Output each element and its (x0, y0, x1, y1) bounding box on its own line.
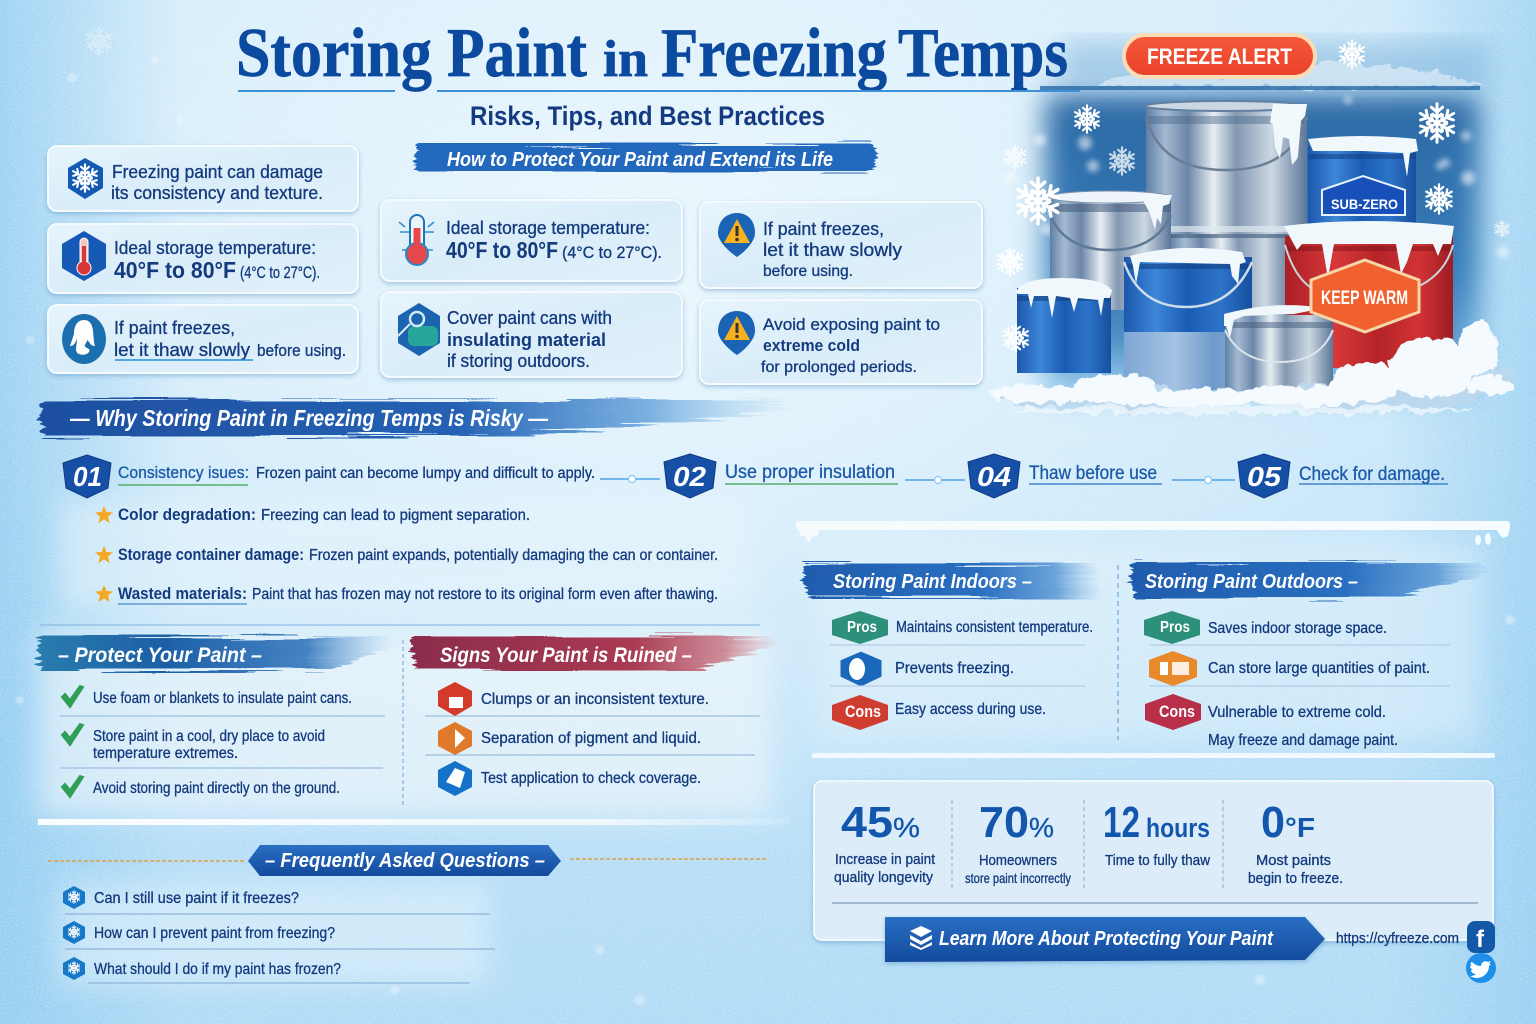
pros: saves space: Saves indoor storage space. (1208, 620, 1387, 637)
text: its consistency and texture. (111, 183, 323, 203)
panel: thaw card left (48, 305, 358, 373)
panel: freezing damage card (48, 146, 358, 211)
tip: cool dry place: Store paint in a cool, dry place to avoid (93, 728, 325, 745)
hero backdrop (1045, 95, 1480, 395)
cons: vulnerable: May freeze and damage paint. (1208, 732, 1398, 749)
step 04 (968, 454, 1162, 498)
step 01: 01 (73, 461, 102, 492)
freeze alert badge: FREEZE ALERT (1147, 44, 1292, 69)
text: Freezing paint can damage (112, 162, 323, 182)
text: 40°F to 80°F (446, 237, 558, 263)
benefit: large quantities: Can store large quantities of paint. (1208, 660, 1430, 677)
tip: off the ground (62, 776, 340, 797)
small silver can (1224, 305, 1333, 391)
top ledge with snow (1040, 42, 1490, 90)
panel: signs paint is ruined (412, 636, 780, 796)
text: insulating material (447, 330, 606, 350)
icon: facebook (1467, 921, 1495, 953)
faq heading: – Frequently Asked Questions – (265, 850, 545, 872)
ice bar (796, 521, 1510, 545)
panel: protect your paint (38, 636, 396, 797)
tip: foam (62, 686, 352, 707)
risk: color degradation (95, 505, 530, 524)
step 05 (1238, 454, 1448, 498)
sign: clumps: Clumps or an inconsistent texture. (481, 691, 709, 708)
heading (412, 636, 780, 670)
title: Temps (898, 15, 1068, 92)
title: Freezing (661, 15, 887, 92)
panel: storing outdoors (1130, 562, 1490, 749)
stat: 45% (834, 798, 936, 886)
cons: easy access: Easy access during use. (895, 701, 1046, 718)
text: let it thaw slowly (763, 240, 902, 260)
stat: 70%: 70 (979, 798, 1029, 847)
subtitle: Risks, Tips, and Best Practices (470, 101, 825, 131)
text (761, 315, 940, 376)
text (111, 162, 323, 203)
question 2 (63, 921, 335, 944)
connector (1172, 476, 1235, 484)
cons: vulnerable: Vulnerable to extreme cold. (1208, 704, 1386, 721)
panel: thaw card right (700, 202, 982, 288)
pros: consistent temperature: Maintains consistent temperature. (896, 619, 1093, 636)
icon: thermometer (399, 215, 434, 265)
cons: easy access: Cons (845, 702, 881, 721)
step 01: Frozen paint can become lumpy and difficult to apply. (256, 465, 595, 482)
sign: separation: Separation of pigment and liquid. (481, 730, 701, 747)
stat: 70% (965, 798, 1071, 886)
tip: off the ground: Avoid storing paint directly on the ground. (93, 780, 340, 797)
icon: warning (718, 213, 755, 257)
stat: 45%: Increase in paint (835, 851, 936, 868)
icon: warning (718, 311, 755, 355)
icon: stack (910, 926, 932, 950)
cons: vulnerable (1145, 694, 1398, 749)
text: Ideal storage temperature: (446, 218, 650, 238)
small blue can (1016, 278, 1112, 373)
text: Cover paint cans with (447, 308, 612, 328)
text (763, 219, 902, 280)
freeze alert badge (1124, 35, 1315, 77)
text: (4°C to 27°C). (240, 263, 320, 282)
stat: 70%: Homeowners (979, 852, 1057, 869)
banner: why risky (38, 400, 800, 436)
bokeh (1005, 96, 1509, 258)
risk: color degradation: Freezing can lead to pigment separation. (261, 507, 530, 524)
stat: 0°F: °F (1285, 812, 1315, 843)
risk: container damage (95, 545, 718, 564)
text: (4°C to 27°C). (562, 243, 662, 262)
banner: why risky: — Why Storing Paint in Freezing Temps is Risky — (69, 405, 549, 431)
risk: wasted materials (95, 584, 718, 604)
risk: wasted materials: Wasted materials: (118, 584, 247, 603)
badge: keep warm (1311, 260, 1419, 332)
heading (802, 564, 1100, 598)
step 02: 02 (673, 461, 706, 492)
snow drifts (987, 322, 1515, 414)
connector (905, 476, 965, 484)
panel: ideal temperature card left (48, 224, 358, 293)
heading: – Protect Your Paint – (58, 644, 262, 667)
risk: container damage: Frozen paint expands, potentially damaging the can or container. (309, 547, 718, 564)
left silver can (1049, 191, 1172, 310)
icon: facebook: f (1476, 926, 1485, 953)
icon: thaw drop (62, 314, 106, 364)
panel: cover paint cans card (381, 292, 682, 377)
center blue can (1124, 248, 1252, 390)
panel: ideal temperature card middle (381, 200, 682, 281)
banner: how to protect: How to Protect Your Paint and Extend its Life (447, 149, 833, 171)
text: let it thaw slowly (114, 340, 250, 360)
hero illustration: frozen paint cans (987, 40, 1515, 414)
sign: test application (438, 761, 701, 796)
icon: twitter (1466, 953, 1496, 983)
risk list (95, 505, 718, 604)
step 05: Check for damage. (1299, 464, 1445, 485)
panel: statistics (814, 781, 1493, 940)
stat: 12 hours: 12 (1103, 798, 1140, 847)
call to action button (885, 917, 1325, 962)
pros: consistent temperature (832, 611, 1093, 644)
connector (600, 476, 660, 482)
tip: cool dry place (62, 724, 325, 762)
blue back can (1308, 136, 1418, 231)
panel: avoid exposing card (700, 300, 982, 384)
heading: Storing Paint Outdoors – (1145, 571, 1358, 593)
step 01 (63, 455, 595, 498)
risk: wasted materials: Paint that has frozen may not restore to its original form even after thawing. (252, 586, 718, 603)
question 3: What should I do if my paint has frozen? (94, 961, 341, 978)
pros: saves space: Pros (1160, 619, 1190, 636)
text (446, 218, 662, 263)
stat: 70%: % (1029, 812, 1054, 843)
stat: 45%: 45 (841, 798, 893, 847)
badge: keep warm: KEEP WARM (1321, 288, 1408, 309)
text: extreme cold (763, 336, 860, 355)
risk: color degradation: Color degradation: (118, 505, 256, 524)
snowflakes (996, 40, 1510, 352)
icon: insulating cover (398, 303, 440, 356)
stat: 45%: % (893, 812, 920, 843)
stat: 12 hours (1103, 798, 1210, 869)
icon: snowflake (68, 158, 103, 199)
text: Ideal storage temperature: (114, 238, 316, 258)
red can (1284, 221, 1454, 368)
tip: foam: Use foam or blankets to insulate paint cans. (93, 690, 352, 707)
faq list (63, 886, 341, 980)
pros: saves space (1144, 611, 1387, 644)
stat: 45%: quality longevity (834, 869, 933, 886)
icon: thermometer (62, 231, 106, 281)
cons: vulnerable: Cons (1159, 702, 1195, 721)
step 02: Use proper insulation (725, 462, 895, 483)
heading (38, 636, 396, 670)
sign: clumps (438, 682, 709, 716)
stat: 12 hours: hours (1146, 813, 1210, 843)
heading: Storing Paint Indoors – (833, 571, 1032, 593)
sign: test application: Test application to check coverage. (481, 770, 701, 787)
text: Avoid exposing paint to (763, 315, 940, 334)
stat: 0°F (1248, 798, 1343, 887)
step 05: 05 (1247, 461, 1281, 492)
text: 40°F to 80°F (114, 257, 236, 283)
faq heading (48, 845, 768, 876)
text: before using. (257, 341, 346, 360)
step row (63, 454, 1448, 498)
pros: consistent temperature: Pros (847, 619, 877, 636)
panel: storing indoors (802, 564, 1100, 730)
step 04: 04 (977, 461, 1011, 492)
text: If paint freezes, (114, 318, 235, 338)
benefit: prevents freezing: Prevents freezing. (895, 660, 1014, 677)
question 1 (63, 886, 299, 909)
risk: container damage: Storage container damage: (118, 545, 304, 564)
step 02 (664, 454, 898, 498)
heading: Signs Your Paint is Ruined – (440, 644, 692, 667)
cons: easy access (832, 695, 1046, 730)
title: Paint (447, 15, 587, 92)
text: for prolonged periods. (761, 359, 917, 376)
title: in (603, 31, 648, 88)
call to action button: Learn More About Protecting Your Paint (939, 928, 1274, 950)
text (114, 318, 346, 360)
step 04: Thaw before use (1029, 463, 1157, 484)
text (447, 308, 612, 371)
stat: 0°F: 0 (1261, 798, 1285, 847)
tip: cool dry place: temperature extremes. (93, 745, 238, 762)
heading (1130, 562, 1490, 598)
question 3 (63, 957, 341, 980)
title (236, 15, 1080, 92)
text: if storing outdoors. (447, 351, 590, 371)
text (114, 238, 320, 283)
title: Storing (236, 15, 432, 92)
benefit: prevents freezing (840, 651, 1014, 687)
large silver can (1145, 101, 1307, 313)
step 01: Consistency isues: (118, 463, 249, 482)
question 1: Can I still use paint if it freezes? (94, 890, 299, 907)
sign: sub-zero: SUB-ZERO (1331, 196, 1398, 212)
question 2: How can I prevent paint from freezing? (94, 925, 335, 942)
text: If paint freezes, (763, 219, 884, 239)
sign: separation (438, 722, 701, 755)
stat: 0°F: Most paints (1256, 852, 1331, 869)
website link: https://cyfreeze.com (1336, 930, 1459, 947)
stat: 0°F: begin to freeze. (1248, 870, 1343, 887)
stat: 70%: store paint incorrectly (965, 870, 1071, 886)
text: before using. (763, 263, 853, 280)
stat: 12 hours: Time to fully thaw (1105, 852, 1210, 869)
benefit: large quantities (1149, 651, 1430, 686)
